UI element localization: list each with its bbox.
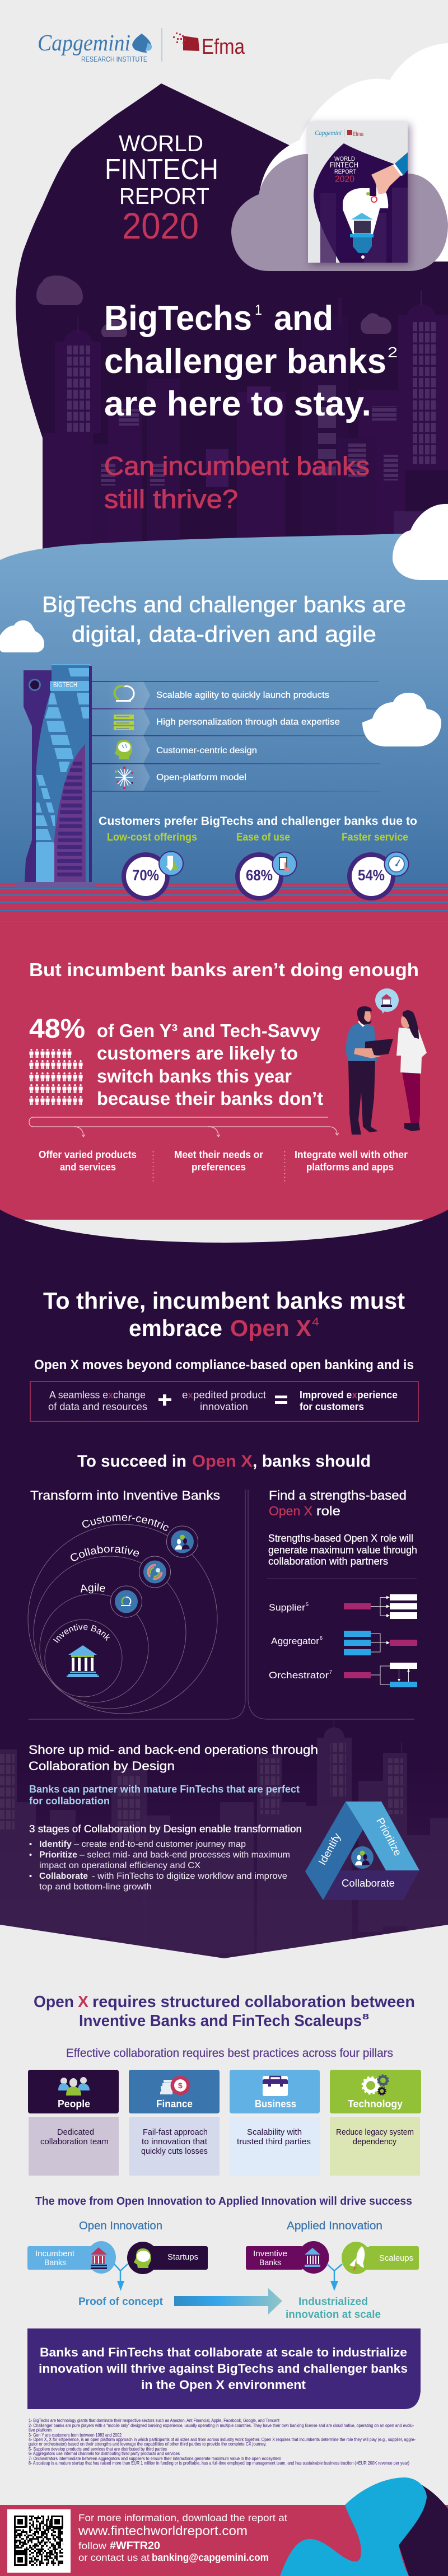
pillar detail: business: trusted third parties: [237, 2138, 311, 2146]
pillar: finance: [129, 2070, 220, 2113]
footnotes: [29, 2418, 416, 2466]
term: exchange: [48, 1389, 147, 1412]
divider between columns: [29, 1490, 414, 1719]
title: World FinTech Report 2020: WORLD: [119, 130, 203, 156]
white cloud right: [362, 693, 441, 746]
heading: BigTechs and challenger banks are digital: digital, data-driven and agile: [72, 622, 376, 647]
conclusion banner: [27, 2328, 421, 2409]
title: World FinTech Report 2020: 2020: [122, 205, 199, 246]
heading: BigTechs and challenger banks are digital: BigTechs and challenger banks are: [42, 592, 406, 617]
reason: needs or preferences: Meet their needs or: [174, 1149, 263, 1160]
report cover: FINTECH: [330, 160, 358, 169]
pillar: people: People: [58, 2098, 90, 2110]
role diagram: orchestrator: [269, 1663, 417, 1687]
stat: 54% faster service: 54%: [358, 867, 385, 884]
headline: BigTechs and challenger banks are here to stay: 1: [255, 301, 262, 318]
woman: [396, 1010, 427, 1131]
heading: Open X requires structured collaboration: X: [78, 1993, 89, 2011]
inventive banks: Banks: [259, 2258, 281, 2267]
heading: to succeed in Open X: [77, 1452, 371, 1471]
headline: BigTechs and challenger banks are here to stay: [104, 299, 398, 423]
pillar detail: finance: to innovation that: [142, 2138, 207, 2146]
footer corner shapes: [280, 2477, 448, 2576]
term: improved experience: [300, 1389, 398, 1412]
icon: gears: [362, 2075, 389, 2095]
term: improved experience: for customers: [300, 1401, 364, 1412]
inventive banks: [246, 2241, 329, 2274]
statement: Gen Y and Tech-Savvy customers: customers are likely to: [97, 1043, 298, 1063]
grey section edge: [0, 1925, 448, 1977]
report cover: 2020: [335, 174, 354, 184]
feature: scalable agility: [106, 682, 329, 709]
scaleups: Scaleups: [379, 2253, 413, 2263]
illustration: BigTech building: [16, 664, 96, 888]
text: strengths-based role value: [268, 1533, 417, 1567]
heading: to thrive embrace Open X: embrace: [129, 1315, 222, 1341]
subheading: banks can partner: for collaboration: [29, 1795, 110, 1807]
report cover: WORLD: [334, 156, 355, 162]
logos: Capgemini Research Institute and Efma: RESEARCH INSTITUTE: [81, 55, 147, 63]
diagram: identify prioritize collaborate triangle: [305, 1802, 419, 1900]
diagram: identify prioritize collaborate triangle: Identify: [316, 1831, 343, 1867]
headline: BigTechs and challenger banks are here to stay: BigTechs: [104, 299, 252, 338]
conclusion banner: Banks and FinTechs that collaborate at scale to industrialize: [40, 2345, 407, 2359]
incumbent banks: [27, 2241, 116, 2274]
stat: 70% low-cost offerings: 70%: [132, 867, 159, 884]
pillar detail: people: [29, 2117, 119, 2176]
report cover: Capgemini: [315, 129, 342, 137]
subheadline: Can incumbent banks still thrive: still thrive?: [104, 484, 238, 514]
heading: shore up operations: [29, 1743, 318, 1773]
footnotes: 3- Gen Y are customers born between 1983 and 2002: [29, 2433, 122, 2438]
role diagram: aggregator: 6: [320, 1635, 323, 1641]
footer text: more information and contact: banking@capgemini.com: [152, 2552, 269, 2563]
feature: open-platform model: Open-platform model: [156, 773, 246, 782]
diagram: open innovation: [27, 2220, 208, 2308]
title: World FinTech Report 2020: FINTECH: [105, 153, 218, 186]
role diagram: orchestrator: Orchestrator: [269, 1670, 329, 1681]
footer band: [0, 2505, 448, 2576]
heading: open to applied innovation: The move from Open Innovation to Applied Innovation will drive success: [35, 2195, 412, 2208]
logos: Capgemini Research Institute and Efma: Efma: [202, 35, 245, 59]
lower skyline: [0, 1719, 448, 1956]
icon: gauge: [384, 852, 409, 876]
subheading: banks can partner: Banks can partner with mature FinTechs that are perfect: [29, 1784, 300, 1795]
stat labels: Faster service: [342, 832, 408, 843]
heading: BigTechs and challenger banks are digital: [42, 592, 406, 647]
scaleups: [342, 2242, 419, 2274]
hero small dark clouds: [36, 276, 391, 337]
reason: needs or preferences: preferences: [192, 1161, 246, 1173]
stat: 70% low-cost offerings: [122, 851, 183, 900]
footnotes: 6- Aggregators use internal channels for distributing third party products and services: [29, 2451, 180, 2456]
diagram: open innovation: Open Innovation: [79, 2220, 162, 2232]
role diagram: supplier: 5: [306, 1602, 309, 1607]
term: innovation: innovation: [200, 1401, 248, 1412]
list: three stages: Collaborate: [39, 1872, 88, 1881]
reason: varied products: Offer varied products: [39, 1149, 137, 1160]
pillar: technology: Technology: [348, 2098, 403, 2110]
incumbent banks: Banks: [44, 2258, 66, 2267]
icon: coins: [160, 2076, 190, 2095]
pillar: technology: [330, 2070, 421, 2113]
icon: customer-centric: [167, 1526, 198, 1557]
icon: coins: $: [178, 2081, 183, 2090]
stat: 68% ease of use: [235, 852, 297, 900]
list: three stages: [29, 1840, 290, 1892]
footer text: more information and contact: [78, 2512, 287, 2563]
pillar: finance: Finance: [156, 2098, 193, 2110]
footer text: more information and contact: www.fintechworldreport.com: [78, 2523, 248, 2538]
diagram: applied innovation: Applied Innovation: [287, 2220, 382, 2232]
illustration: two customers talking: [346, 988, 427, 1135]
subheading: 3 stages: 3 stages of Collaboration by Design enable transformation: [29, 1823, 302, 1835]
arrow: proof of concept merge: [114, 2264, 128, 2291]
reason: integrate with platforms: platforms and apps: [306, 1161, 394, 1173]
white cloud behind report cover: [259, 43, 448, 262]
heading: find a strengths-based Open X role: Find a strengths-based: [269, 1488, 407, 1502]
feature row lines: [91, 681, 380, 792]
pillar detail: technology: dependency: [353, 2138, 397, 2146]
heading: shore up operations: Collaboration by Design: [29, 1759, 175, 1773]
icon: agile: [111, 1586, 142, 1617]
logos: Capgemini Research Institute and Efma: [38, 28, 245, 63]
heading: Open X requires structured collaboration: requires structured collaboration between: [92, 1993, 415, 2011]
lavender cloud: [231, 154, 448, 271]
title: World FinTech Report 2020: [105, 130, 218, 246]
stat labels: Low-cost offerings: [107, 832, 197, 843]
title: World FinTech Report 2020: REPORT: [119, 183, 209, 209]
pillar detail: business: [230, 2117, 320, 2176]
white cloud top right: [393, 504, 448, 580]
heading: to succeed in Open X: To succeed in: [77, 1452, 186, 1471]
reason: integrate with platforms: [295, 1149, 408, 1173]
heading: find a strengths-based Open X role: [269, 1488, 407, 1518]
role diagram: aggregator: Aggregator: [271, 1636, 319, 1646]
incumbent banks: Incumbent: [35, 2249, 75, 2258]
footnotes: tive platform: [29, 2428, 52, 2433]
statement: Gen Y and Tech-Savvy customers: switch banks this year: [97, 1066, 292, 1086]
heading: to thrive embrace Open X: [43, 1287, 405, 1341]
icon: price down: [159, 851, 183, 876]
footer text: more information and contact: follow: [78, 2540, 106, 2551]
stat: 68% ease of use: 68%: [246, 867, 273, 884]
heading: shore up operations: Shore up mid- and back-end operations through: [29, 1743, 318, 1757]
reason: varied products: and services: [60, 1161, 116, 1173]
statement: Gen Y and Tech-Savvy customers: [97, 1020, 323, 1109]
heading: Open X requires structured collaboration: Open: [34, 1993, 74, 2011]
speech bubble with bank icon: [375, 988, 399, 1014]
icon: phone: [272, 852, 297, 876]
role diagram: orchestrator: 7: [329, 1669, 332, 1675]
list: three stages: Prioritize: [39, 1850, 77, 1860]
startups: [127, 2242, 208, 2274]
stat labels: [107, 832, 408, 843]
pillar detail: business: Scalability with: [247, 2128, 302, 2137]
feature list: [106, 682, 340, 791]
heading: Open X requires structured collaboration: 8: [362, 2012, 369, 2022]
list: three stages: Identify: [39, 1840, 72, 1849]
pillar detail: finance: quickly cuts losses: [141, 2147, 208, 2156]
headline: BigTechs and challenger banks are here to stay: are here to stay.: [104, 385, 371, 423]
pillar: business: [230, 2070, 320, 2113]
reason: integrate with platforms: Integrate well with other: [295, 1149, 408, 1160]
text: strengths-based role value: Strengths-based Open X role will: [268, 1533, 413, 1544]
statement: Gen Y and Tech-Savvy customers: because their banks don’t: [97, 1088, 323, 1109]
pillar: business: Business: [255, 2098, 296, 2110]
term: innovation: [182, 1389, 266, 1412]
heading: transform into inventive banks: Transform into Inventive Banks: [30, 1488, 220, 1502]
conclusion banner: in the Open X environment: [141, 2378, 306, 2392]
illustration: BigTech building: BIGTECH: [53, 680, 77, 689]
footer text: more information and contact: or contact us at: [78, 2552, 150, 2563]
role diagram: supplier: [269, 1594, 417, 1619]
diagram: applied innovation: Industrialized: [298, 2296, 368, 2308]
arrow: industrialized merge: [327, 2264, 342, 2291]
feature: personalization: High personalization through data expertise: [156, 717, 340, 727]
white cloud left: [0, 620, 44, 652]
text: strengths-based role value: collaboration with partners: [268, 1556, 388, 1567]
subheading: banks can partner: [29, 1784, 300, 1807]
report cover: Efma: [353, 131, 364, 138]
heading: Open X requires structured collaboration: [34, 1993, 415, 2030]
footnotes: 1- BigTechs are technology giants that dominate their respective sectors such as Amazon, Ant Financial, Apple, Facebook, Google, and Tencent: [29, 2418, 280, 2423]
heading: to thrive embrace Open X: Open X: [230, 1315, 311, 1341]
footnotes: 5- Suppliers develop products and services that are distributed by third parties: [29, 2447, 167, 2452]
report cover: [308, 122, 408, 263]
role diagram: supplier: Supplier: [269, 1602, 305, 1613]
hero dark background shape: [16, 83, 448, 552]
dark section background: [0, 1210, 448, 1960]
heading: Open X requires structured collaboration: Inventive Banks and FinTech Scaleups: [79, 2012, 362, 2030]
pillar detail: finance: Fail-fast approach: [143, 2128, 208, 2137]
diagram: inventive bank concentric spheres: [28, 1515, 217, 1714]
logos: Capgemini Research Institute and Efma: Capgemini: [38, 30, 130, 55]
list: three stages: – select mid- and back-end processes with maximum: [80, 1850, 290, 1860]
diagram: applied innovation: innovation at scale: [286, 2309, 381, 2321]
diagram: inventive bank concentric spheres: Inventive Bank: [53, 1624, 110, 1643]
pictogram: people grid: [29, 1049, 83, 1105]
diagram: open innovation: Proof of concept: [78, 2296, 164, 2308]
term: exchange: A seamless exchange: [49, 1389, 146, 1401]
subheading: four pillars: Effective collaboration requires best practices across four pillars: [66, 2047, 393, 2060]
pillar: people: [28, 2070, 119, 2113]
stat labels: Ease of use: [236, 832, 290, 843]
pillar detail: finance: [129, 2117, 220, 2176]
heading: to succeed in Open X: , banks should: [253, 1452, 371, 1471]
icon: collaborative: [139, 1556, 170, 1588]
transition stripes: [0, 885, 448, 922]
list: three stages: - with FinTechs to digitize workflow and improve: [92, 1872, 287, 1881]
man: [346, 1006, 393, 1135]
list: three stages: top and bottom-line growth: [39, 1882, 152, 1892]
statement: Gen Y and Tech-Savvy customers: of Gen Y³ and Tech-Savvy: [97, 1020, 321, 1041]
icon: briefcase: [263, 2076, 288, 2096]
footer text: more information and contact: #WFTR20: [110, 2540, 160, 2552]
heading: find a strengths-based Open X role: Open X: [269, 1504, 312, 1518]
diagram: identify prioritize collaborate triangle: Prioritize: [374, 1816, 403, 1858]
QR code: [7, 2509, 71, 2573]
headline: BigTechs and challenger banks are here to stay: 2: [388, 344, 398, 361]
footnotes: 7- Orchestrators intermediate between aggregators and suppliers to ensure their interactions generate maximum value in the open ecosystem: [29, 2456, 281, 2461]
diagram: inventive bank concentric spheres: Customer-centric: [82, 1515, 169, 1531]
pillar detail: technology: Reduce legacy system: [336, 2128, 414, 2137]
stat: 54% faster service: [347, 852, 409, 900]
inventive banks: Inventive: [253, 2249, 287, 2258]
equation box: [30, 1382, 418, 1421]
icon: inventive bank building: [67, 1645, 99, 1677]
feature: scalable agility: Scalable agility to quickly launch products: [156, 690, 329, 700]
footnotes: gator or orchestrator) based on their strengths and leverage the capabilities of other third parties to provide the complete CX journey.: [29, 2442, 267, 2447]
heading: incumbent banks not doing enough: But incumbent banks aren’t doing enough: [29, 959, 419, 980]
heading: to thrive embrace Open X: 4: [312, 1316, 319, 1328]
pillar detail: people: collaboration team: [40, 2138, 109, 2146]
diagram: inventive bank concentric spheres: Collaborative: [71, 1546, 139, 1561]
pillar detail: technology: [330, 2117, 420, 2176]
diagram: inventive bank concentric spheres: Agile: [81, 1583, 105, 1594]
term: exchange: of data and resources: [48, 1401, 147, 1412]
arrow: proof of concept to industrialized: [174, 2288, 282, 2314]
reason: needs or preferences: [174, 1149, 263, 1173]
red section background: [0, 884, 448, 1220]
startups: Startups: [167, 2252, 198, 2262]
stat: 48%: 48%: [29, 1014, 85, 1044]
term: improved experience: Improved experience: [300, 1389, 398, 1401]
icon: people: [58, 2077, 90, 2096]
headline: BigTechs and challenger banks are here to stay: challenger banks: [104, 342, 386, 381]
feature: personalization: [106, 709, 340, 736]
section background: blue: [0, 532, 448, 890]
conclusion banner: innovation will thrive against BigTechs and challenger banks: [39, 2362, 408, 2376]
list: three stages: – create end-to-end customer journey map: [74, 1840, 246, 1849]
reason: varied products: [39, 1149, 137, 1173]
heading: to succeed in Open X: Open X: [192, 1452, 253, 1471]
text: strengths-based role value: generate maximum value through: [268, 1544, 417, 1556]
headline: BigTechs and challenger banks are here to stay: and: [274, 299, 333, 338]
diagram: applied innovation: [246, 2220, 419, 2321]
footer text: more information and contact: For more information, download the report at: [78, 2512, 287, 2523]
subheadline: Can incumbent banks still thrive: Can incumbent banks: [104, 451, 370, 480]
heading: customers prefer: Customers prefer BigTechs and challenger banks due to: [99, 815, 417, 828]
subheadline: Can incumbent banks still thrive: [104, 451, 370, 514]
feature: customer-centric design: [106, 736, 257, 763]
term: innovation: expedited product: [182, 1389, 266, 1401]
feature: open-platform model: [106, 764, 246, 791]
heading: find a strengths-based Open X role: role: [316, 1504, 340, 1518]
report cover: REPORT: [334, 169, 356, 175]
heading: to thrive embrace Open X: To thrive, incumbent banks must: [43, 1287, 405, 1314]
role diagram: aggregator: [271, 1631, 417, 1655]
diagram: identify prioritize collaborate triangle: Collaborate: [342, 1878, 395, 1889]
hero skyline: [43, 291, 448, 557]
subheading: Open X moves beyond: Open X moves beyond compliance-based open banking and is: [34, 1357, 414, 1373]
feature: customer-centric design: Customer-centric design: [156, 746, 257, 755]
pillar detail: people: Dedicated: [57, 2128, 94, 2137]
bracket with arrows: [29, 1117, 339, 1137]
list: three stages: impact on operational efficiency and CX: [39, 1861, 200, 1870]
